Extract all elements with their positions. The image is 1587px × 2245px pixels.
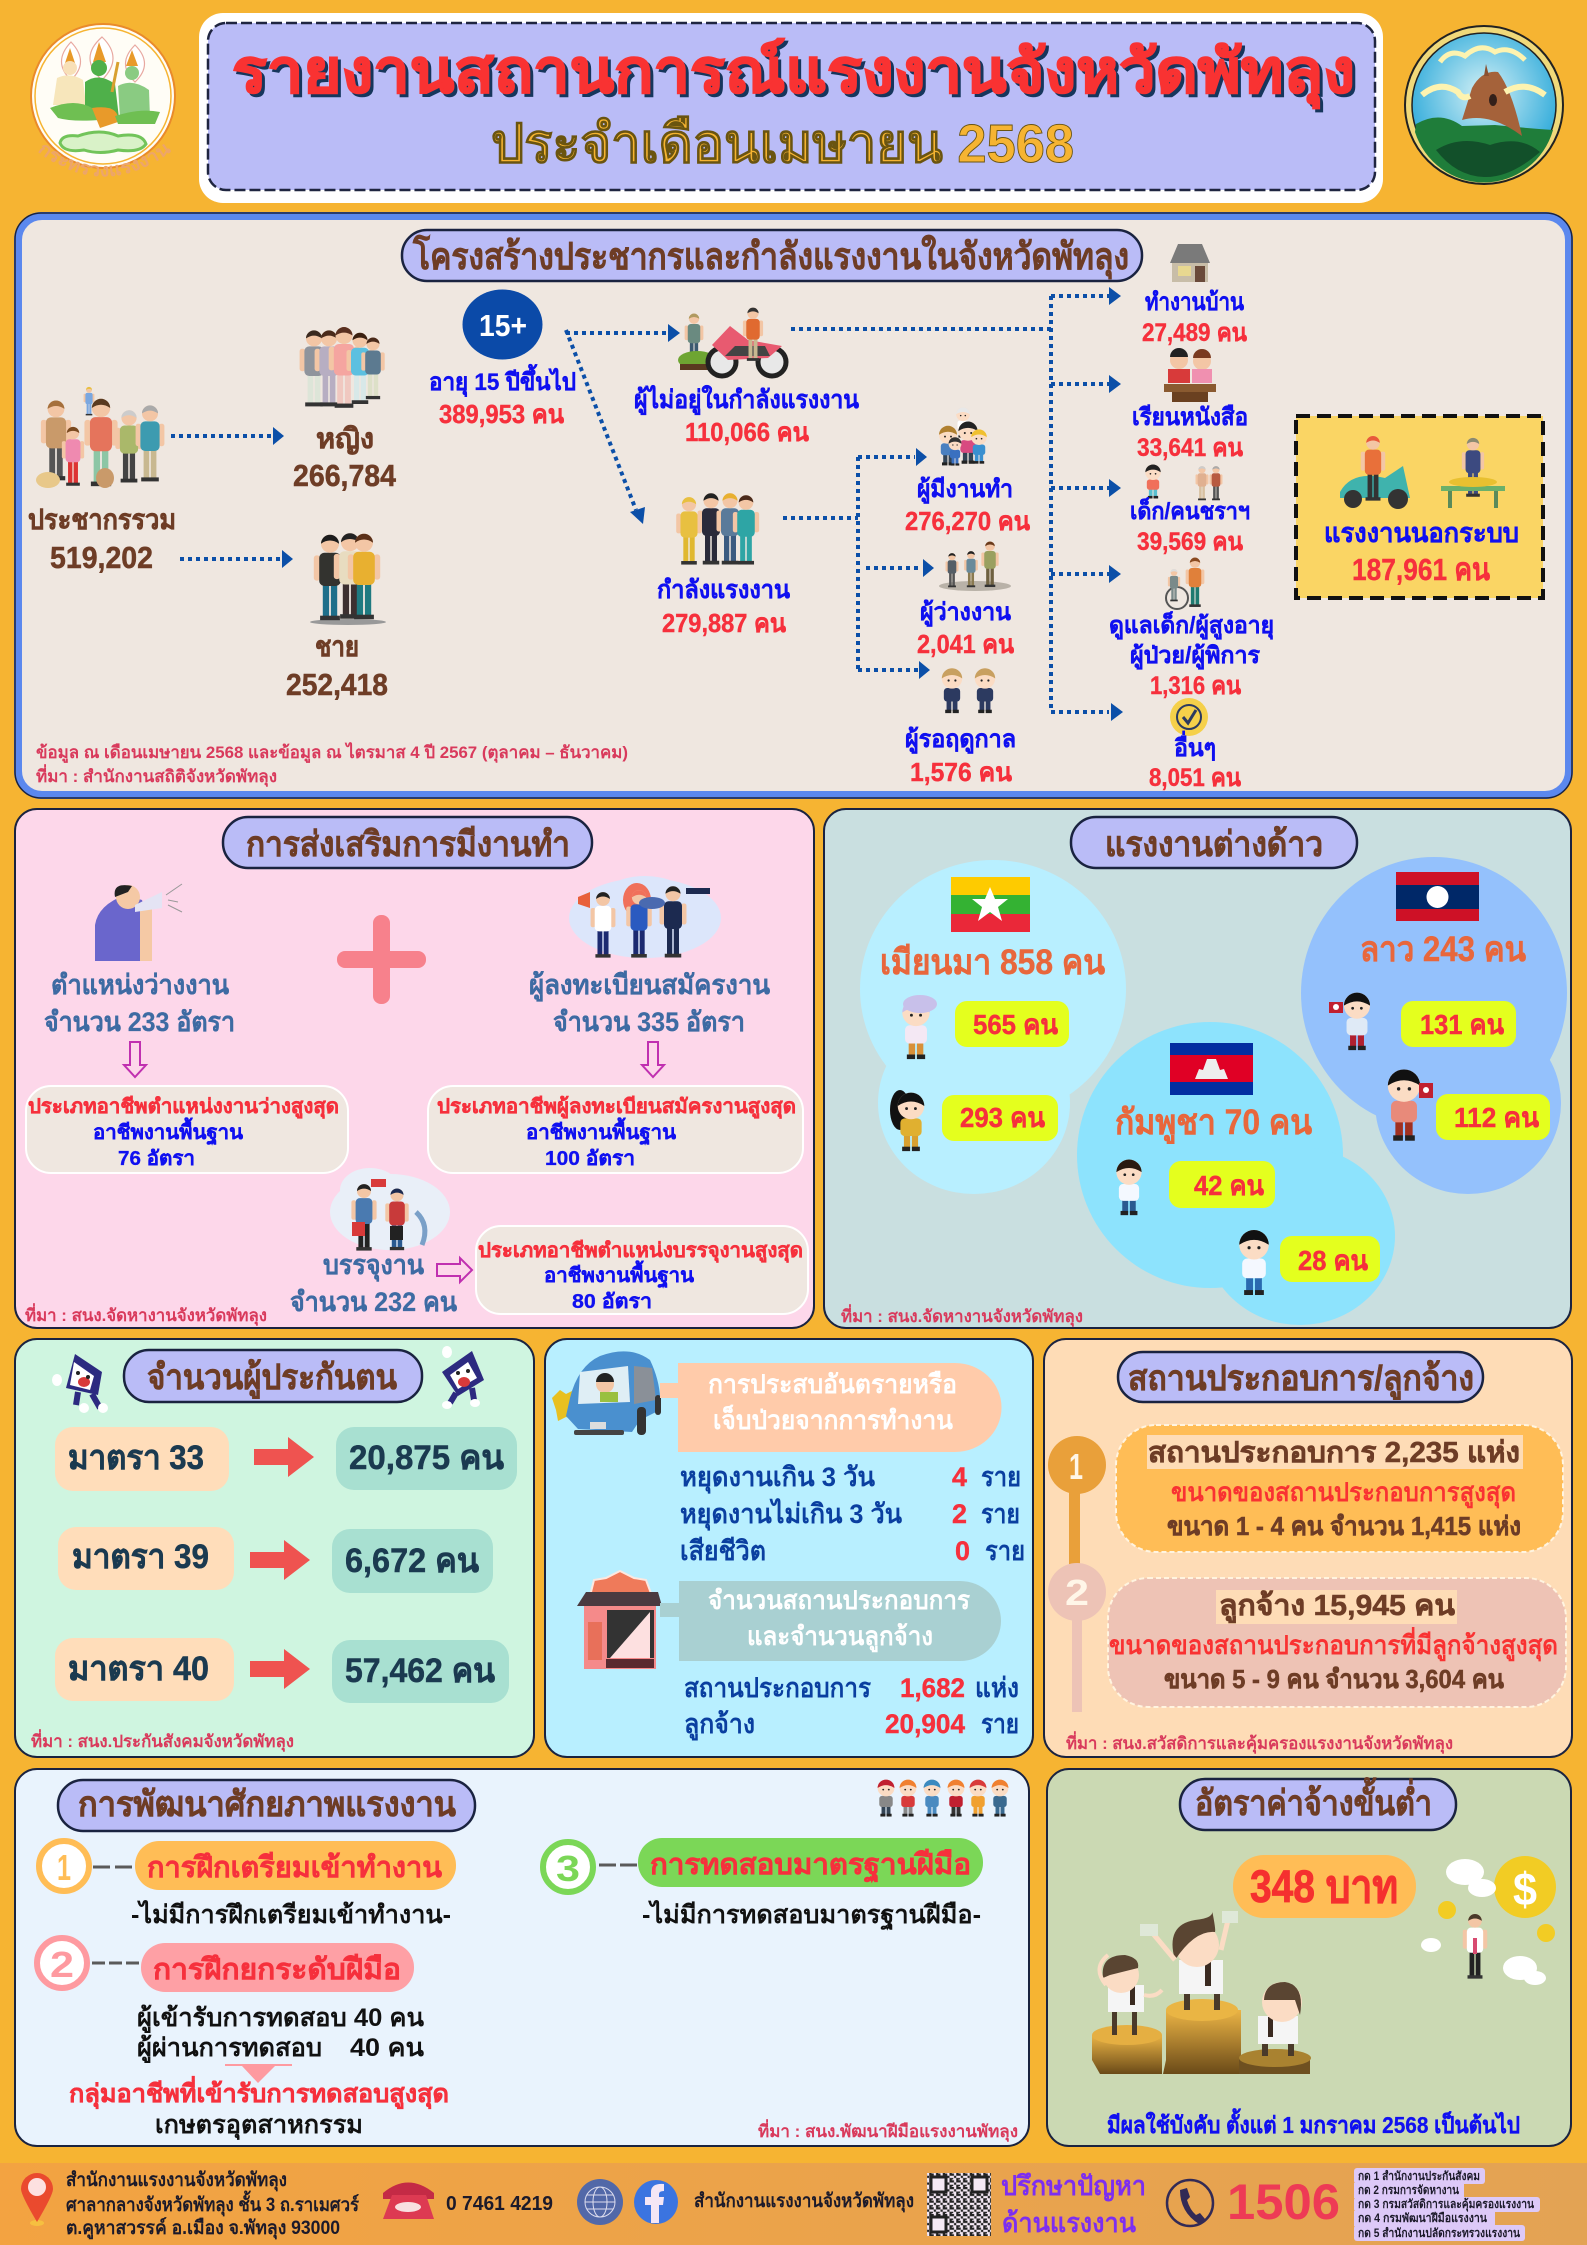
accident counts: หยุดงานเกิน 3 วัน (680, 1462, 876, 1494)
accident counts: 2 (952, 1499, 967, 1529)
male count: 42 คน (1194, 1170, 1264, 1201)
facebook page name: สำนักงานแรงงานจังหวัดพัทลุง (694, 2191, 914, 2213)
box: top vacancy occupation: อาชีพงานพื้นฐาน (93, 1117, 243, 1146)
women label: หญิง (316, 423, 374, 455)
unemployed label: ผู้ว่างงาน (920, 599, 1012, 627)
panel: minimum wage (1047, 1769, 1571, 2146)
bubble: Cambodia (1077, 1022, 1395, 1325)
establishment counts: ลูกจ้าง (684, 1709, 755, 1741)
care label: ผู้ป่วย/ผู้พิการ (1130, 642, 1261, 670)
icon: Laos flag (1396, 872, 1479, 921)
male count (1401, 1001, 1516, 1047)
studying label: เรียนหนังสือ (1132, 404, 1248, 431)
step 2: skill upgrading (37, 1938, 449, 2141)
female count (942, 1095, 1058, 1141)
badge: 15+ (462, 290, 542, 360)
bubble: Myanmar (860, 860, 1126, 1194)
icon: facebook (634, 2180, 678, 2224)
accident counts: 4 (952, 1462, 967, 1492)
callout: informal workers: แรงงานนอกระบบ (1324, 518, 1519, 548)
panel: skill development (15, 1769, 1029, 2146)
heading (1180, 1777, 1456, 1830)
male count: 565 คน (973, 1009, 1058, 1040)
step 2: skill upgrading: 40 คน (350, 2034, 424, 2062)
box: top applicants occupation: อาชีพงานพื้นฐาน (526, 1117, 676, 1146)
icon: child and elders (1145, 465, 1222, 500)
arrow: 15+ to not in labour force (566, 324, 680, 342)
not in labour force label: 110,066 คน (685, 417, 809, 447)
icon: women group (300, 327, 385, 408)
box: top applicants occupation: 100 อัตรา (545, 1148, 635, 1170)
icon: family (36, 387, 164, 488)
arrow: not in labour force branches (791, 287, 1123, 721)
phone number: 0 7461 4219 (446, 2193, 553, 2215)
seasonal label: 1,576 คน (910, 757, 1012, 787)
step 3: skill standards test (543, 1838, 983, 1931)
box: employees: ลูกจ้าง 15,945 คน (1219, 1590, 1455, 1623)
female count: 112 คน (1454, 1102, 1539, 1133)
establishment counts: แห่ง (975, 1673, 1019, 1703)
heading (223, 817, 592, 868)
others label: อื่นๆ (1174, 730, 1216, 762)
women label: 266,784 (293, 458, 397, 493)
hotline menu: กด 1 สำนักงานประกันสังคม (1358, 2169, 1480, 2183)
accident counts: 0 (955, 1536, 970, 1566)
establishment counts: 1,682 (900, 1673, 965, 1703)
others label: 8,051 คน (1149, 764, 1241, 792)
hotline caption: ด้านแรงงาน (1002, 2208, 1137, 2238)
applicants label: ผู้ลงทะเบียนสมัครงาน (529, 970, 771, 1002)
marker: step 1 (1048, 1436, 1106, 1565)
box: establishments: ขนาดของสถานประกอบการสูงสุด (1171, 1477, 1516, 1509)
address: สำนักงานแรงงานจังหวัดพัทลุง (66, 2170, 287, 2192)
hotline number: 1506 (1227, 2174, 1340, 2230)
housework label: ทำงานบ้าน (1145, 289, 1245, 316)
icon: mascot right (442, 1346, 484, 1409)
icon: Cambodian woman (1239, 1230, 1269, 1295)
total population label: ประชากรรวม (28, 504, 176, 535)
marker: step 1: 1 (1069, 1446, 1083, 1487)
icon: mascot left (52, 1354, 108, 1413)
step 2: skill upgrading: กลุ่มอาชีพที่เข้ารับการทดสอบสูงสุด (69, 2076, 449, 2110)
applicants label: จำนวน 335 อัตรา (553, 1007, 745, 1037)
step 3: skill standards test: การทดสอบมาตรฐานฝีมือ (650, 1849, 971, 1883)
applicants label (529, 970, 771, 1037)
row: section 40: 57,462 คน (345, 1652, 495, 1690)
box: employees (1108, 1578, 1566, 1707)
source: ที่มา : สนง.จัดหางานจังหวัดพัทลุง (25, 1303, 267, 1326)
placement label: บรรจุงาน (323, 1250, 425, 1282)
heading (124, 1350, 422, 1402)
callout: accidents heading: การประสบอันตรายหรือ (708, 1369, 957, 1399)
heading: การพัฒนาศักยภาพแรงงาน (78, 1785, 456, 1824)
illustration: men on coin stacks (1092, 1910, 1311, 2074)
vacancy label: ตำแหน่งว่างงาน (51, 970, 230, 1000)
arrow: population to men (180, 550, 293, 568)
male count (955, 1001, 1069, 1047)
panel: establishments and employees (1044, 1339, 1572, 1757)
callout: informal workers: 187,961 คน (1352, 552, 1490, 587)
others label (1149, 730, 1241, 792)
icon: seasonal farmers (942, 668, 995, 713)
studying label (1132, 404, 1248, 462)
step 2: skill upgrading: เกษตรอุตสาหกรรม (155, 2111, 363, 2141)
logo: ministry of labour (30, 23, 176, 177)
seasonal label: ผู้รอฤดูกาล (905, 726, 1016, 754)
footer band (0, 2163, 1587, 2245)
source: ที่มา : สนง.พัฒนาฝีมือแรงงานพัทลุง (758, 2119, 1018, 2142)
step 2: skill upgrading: 2 (50, 1944, 74, 1985)
panel: foreign workers (824, 809, 1571, 1328)
heading: อัตราค่าจ้างขั้นต่ำ (1195, 1777, 1432, 1823)
row: section 39 (58, 1527, 493, 1593)
icon: workers labour force (676, 493, 759, 565)
bubble: Myanmar: เมียนมา 858 คน (880, 943, 1105, 982)
figure: left man (1099, 1955, 1162, 2035)
establishment counts: สถานประกอบการ (684, 1673, 871, 1703)
arrow: vacancy down (124, 1042, 146, 1077)
callout: establishments heading: และจำนวนลูกจ้าง (747, 1621, 933, 1653)
box: employees: ขนาดของสถานประกอบการที่มีลูกจ้างสูงสุด (1109, 1626, 1558, 1662)
hotline caption (1001, 2171, 1146, 2238)
icon: Myanmar woman (890, 1090, 924, 1151)
placement label (290, 1250, 457, 1317)
male count (1169, 1161, 1275, 1208)
callout: establishments heading: จำนวนสถานประกอบการ (708, 1585, 970, 1615)
icon: carer and wheelchair (1166, 558, 1204, 609)
women label (293, 423, 397, 493)
men label: 252,418 (286, 667, 388, 702)
hotline menu (1354, 2168, 1540, 2241)
bubble: Laos (1301, 857, 1567, 1194)
box: top placement occupation (476, 1226, 808, 1314)
employed label: 276,270 คน (905, 506, 1030, 536)
not in labour force label (634, 384, 859, 447)
men label: ชาย (315, 631, 359, 662)
heading: โครงสร้างประชากรและกำลังแรงงานในจังหวัดพัทลุง (412, 234, 1129, 280)
icon: Myanmar man (902, 995, 937, 1059)
step 3: skill standards test: -ไม่มีการทดสอบมาตรฐานฝีมือ- (642, 1899, 981, 1931)
icon: check badge (1170, 698, 1208, 736)
step 3: skill standards test: 3 (556, 1848, 580, 1889)
step 2: skill upgrading: ผู้เข้ารับการทดสอบ 40 คน (137, 2004, 424, 2034)
icon: unemployed group (939, 541, 1011, 591)
illustration: man flying with coin balloon: $ (1513, 1863, 1537, 1915)
female count (1280, 1236, 1380, 1282)
establishment counts (684, 1673, 1019, 1741)
box: top placement occupation: ประเภทอาชีพตำแหน่งบรรจุงานสูงสุด (478, 1239, 803, 1264)
icon: men group (310, 533, 386, 625)
box: establishments: ขนาด 1 - 4 คน จำนวน 1,415 แห่ง (1167, 1511, 1521, 1541)
icon: workers row (878, 1780, 1008, 1817)
logo: ministry of labour: กระทรวงแรงงาน (38, 144, 171, 177)
children and elderly label: เด็ก/คนชราฯ (1130, 496, 1250, 524)
illustration: man flying with coin balloon (1421, 1856, 1556, 1985)
icon: street vendor (1441, 438, 1505, 508)
step 1: pre-employment training: -ไม่มีการฝึกเตรียมเข้าทำงาน- (131, 1899, 451, 1929)
heading: แรงงานต่างด้าว (1105, 825, 1323, 864)
icon: Cambodia flag (1170, 1043, 1253, 1095)
labour force label: 279,887 คน (662, 608, 786, 638)
address: ศาลากลางจังหวัดพัทลุง ชั้น 3 ถ.ราเมศวร์ (66, 2190, 360, 2217)
hotline menu: กด 5 สำนักงานปลัดกระทรวงแรงงาน (1358, 2226, 1521, 2240)
heading: การส่งเสริมการมีงานทำ (246, 825, 570, 864)
icon: Cambodian man (1116, 1160, 1142, 1215)
panel: employment promotion (15, 809, 814, 1328)
age 15+ label: อายุ 15 ปีขึ้นไป (429, 363, 576, 398)
arrow: applicants down (642, 1042, 664, 1077)
icon: Lao woman (1388, 1069, 1433, 1141)
panel: work accidents and establishments (545, 1339, 1033, 1757)
heading (1071, 817, 1357, 868)
data notes and source: ข้อมูล ณ เดือนเมษายน 2568 และข้อมูล ณ ไตรมาส 4 ปี 2567 (ตุลาคม – ธันวาคม) (36, 742, 628, 764)
header banner (199, 13, 1383, 203)
box: top vacancy occupation (26, 1086, 348, 1173)
arrow: labour force branches (783, 448, 934, 679)
female count (1436, 1094, 1550, 1140)
arrow: placement right (437, 1258, 472, 1282)
accident counts: เสียชีวิต (680, 1536, 766, 1566)
children and elderly label (1130, 496, 1250, 556)
accident counts: หยุดงานไม่เกิน 3 วัน (680, 1498, 902, 1531)
icon: shop (577, 1571, 662, 1669)
icon: location pin (21, 2173, 53, 2226)
data notes and source (36, 742, 628, 787)
box: top placement occupation: 80 อัตรา (572, 1291, 652, 1313)
care label (1109, 610, 1274, 700)
step 1: pre-employment training: 1 (57, 1847, 71, 1888)
box: top vacancy occupation: 76 อัตรา (118, 1148, 195, 1170)
marker: step 2 (1048, 1563, 1106, 1712)
title: รายงานสถานการณ์แรงงานจังหวัดพัทลุง (232, 38, 1355, 109)
male count: 131 คน (1420, 1009, 1504, 1040)
address (66, 2170, 360, 2240)
subtitle: ประจำเดือนเมษายน 2568 (491, 114, 1074, 174)
box: top applicants occupation: ประเภทอาชีพผู้ลงทะเบียนสมัครงานสูงสุด (437, 1095, 796, 1120)
callout: informal workers (1296, 416, 1543, 598)
marker: step 2: 2 (1065, 1572, 1089, 1613)
not in labour force label: ผู้ไม่อยู่ในกำลังแรงงาน (634, 384, 859, 416)
establishment counts: 20,904 (885, 1709, 965, 1739)
female count: 28 คน (1298, 1245, 1368, 1276)
panel: insured persons (15, 1339, 534, 1757)
wage value: 348 บาท (1250, 1861, 1398, 1912)
figure: middle man raising money (1140, 1910, 1238, 2010)
labour force label: กำลังแรงงาน (657, 576, 790, 604)
vacancy label: จำนวน 233 อัตรา (44, 1007, 235, 1037)
row: section 40: มาตรา 40 (68, 1650, 209, 1688)
box: establishments: สถานประกอบการ 2,235 แห่ง (1148, 1437, 1520, 1469)
icon: Myanmar flag (951, 877, 1030, 932)
callout: establishments heading (660, 1581, 1001, 1661)
row: section 39: 6,672 คน (345, 1542, 479, 1580)
step 2: skill upgrading: ผู้ผ่านการทดสอบ (137, 2034, 322, 2064)
effective date note: มีผลใช้บังคับ ตั้งแต่ 1 มกราคม 2568 เป็นต้นไป (1107, 2108, 1520, 2138)
address: ต.คูหาสวรรค์ อ.เมือง จ.พัทลุง 93000 (66, 2217, 340, 2240)
icon: handshake (330, 1168, 450, 1251)
logo: Phatthalung province seal (1405, 26, 1563, 184)
icon: man with megaphone (95, 884, 182, 961)
step 1: pre-employment training: การฝึกเตรียมเข้าทำงาน (147, 1852, 442, 1884)
children and elderly label: 39,569 คน (1137, 528, 1243, 556)
accident counts: ราย (985, 1536, 1025, 1566)
employed label (905, 476, 1030, 536)
arrow: population to women (171, 427, 284, 445)
icon: handset in circle (1167, 2180, 1213, 2226)
source: ที่มา : สนง.จัดหางานจังหวัดพัทลุง (841, 1304, 1083, 1327)
vacancy label (44, 970, 235, 1037)
step 2: skill upgrading: การฝึกยกระดับฝีมือ (153, 1954, 401, 1986)
housework label: 27,489 คน (1142, 319, 1247, 347)
hotline menu: กด 3 กรมสวัสดิการและคุ้มครองแรงงาน (1358, 2197, 1535, 2212)
box: top applicants occupation (428, 1086, 803, 1173)
labour force label (657, 576, 790, 638)
accident counts (680, 1462, 1025, 1566)
box: employees: ขนาด 5 - 9 คน จำนวน 3,604 คน (1164, 1664, 1504, 1694)
age 15+ label: 389,953 คน (439, 399, 564, 429)
hotline caption: ปรึกษาปัญหา (1001, 2171, 1146, 2202)
icon: house (1170, 244, 1210, 282)
icon: plus sign (337, 915, 426, 1004)
step 1: pre-employment training (39, 1841, 456, 1929)
establishment counts: ราย (981, 1709, 1019, 1739)
men label (286, 631, 388, 702)
row: section 33: 20,875 คน (349, 1439, 504, 1477)
icon: Lao man (1329, 993, 1370, 1050)
row: section 39: มาตรา 39 (72, 1538, 209, 1576)
total population label (28, 504, 176, 575)
total population label: 519,202 (50, 540, 153, 575)
icon: scooter rider (1340, 436, 1410, 509)
bubble: Laos: ลาว 243 คน (1360, 930, 1526, 969)
icon: QR code (927, 2173, 991, 2236)
placement label: จำนวน 232 คน (290, 1287, 457, 1317)
box: top vacancy occupation: ประเภทอาชีพตำแหน่งงานว่างสูงสุด (28, 1095, 339, 1120)
box: establishments (1116, 1425, 1563, 1552)
care label: 1,316 คน (1150, 672, 1241, 700)
icon: car crash (552, 1351, 661, 1435)
row: section 40 (55, 1638, 509, 1703)
icon: website globe (577, 2179, 623, 2225)
icon: employed crowd (939, 407, 987, 466)
heading: สถานประกอบการ/ลูกจ้าง (1128, 1359, 1474, 1400)
source: ที่มา : สนง.สวัสดิการและคุ้มครองแรงงานจังหวัดพัทลุง (1066, 1731, 1453, 1754)
data notes and source: ที่มา : สำนักงานสถิติจังหวัดพัทลุง (36, 764, 277, 787)
heading: จำนวนผู้ประกันตน (147, 1358, 397, 1399)
figure: right man (1258, 1982, 1302, 2056)
care label: ดูแลเด็ก/ผู้สูงอายุ (1109, 610, 1274, 640)
icon: students at desk (1164, 348, 1216, 402)
housework label (1142, 289, 1247, 347)
employed label: ผู้มีงานทำ (917, 476, 1013, 504)
panel: population and labour force structure (15, 213, 1572, 798)
accident counts: ราย (981, 1462, 1021, 1492)
arrow: 15+ to labour force (566, 330, 645, 524)
box: top placement occupation: อาชีพงานพื้นฐาน (544, 1260, 694, 1289)
callout: accidents heading (660, 1363, 1002, 1452)
icon: farmer and motorcycle (678, 308, 786, 376)
row: section 33 (55, 1427, 517, 1491)
unemployed label: 2,041 คน (917, 629, 1014, 659)
bubble: Cambodia: กัมพูชา 70 คน (1115, 1103, 1312, 1144)
hotline menu: กด 4 กรมพัฒนาฝีมือแรงงาน (1358, 2211, 1488, 2225)
studying label: 33,641 คน (1137, 434, 1243, 462)
icon: recruiters group (569, 876, 721, 958)
female count: 293 คน (960, 1102, 1045, 1133)
hotline menu: กด 2 กรมการจัดหางาน (1358, 2183, 1460, 2197)
badge: 15+: 15+ (479, 308, 527, 343)
row: section 33: มาตรา 33 (68, 1439, 204, 1477)
seasonal label (905, 726, 1016, 787)
source: ที่มา : สนง.ประกันสังคมจังหวัดพัทลุง (31, 1729, 294, 1752)
callout: accidents heading: เจ็บป่วยจากการทำงาน (713, 1404, 953, 1435)
age 15+ label (429, 363, 576, 429)
icon: telephone (383, 2182, 434, 2219)
unemployed label (917, 599, 1014, 659)
accident counts: ราย (981, 1499, 1020, 1529)
